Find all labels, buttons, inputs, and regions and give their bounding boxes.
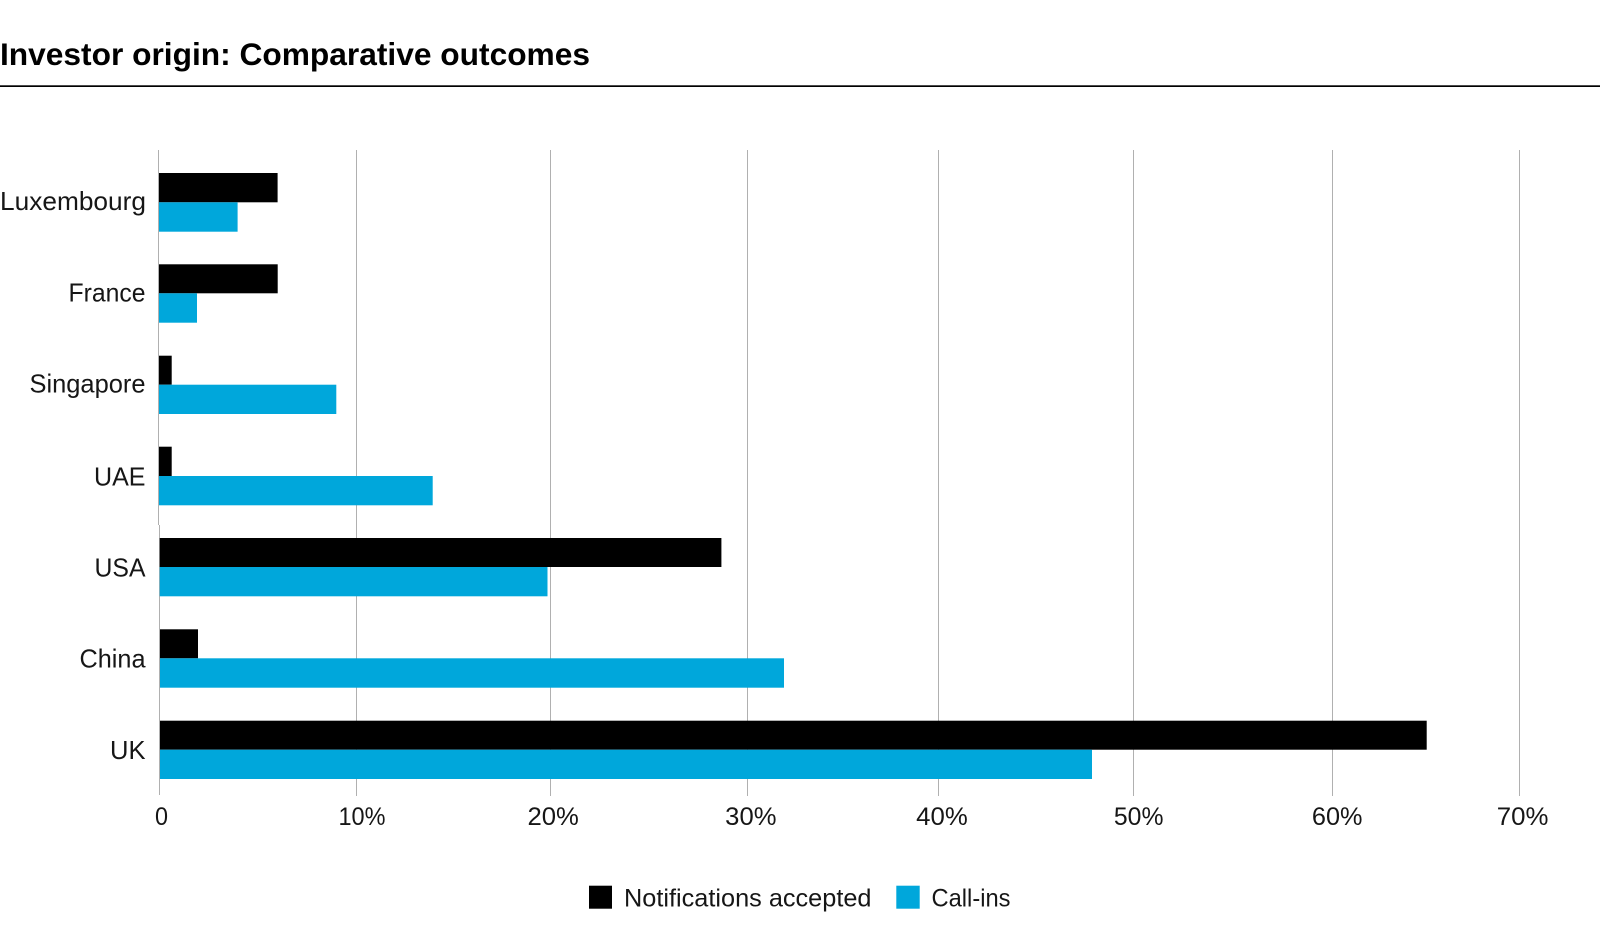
country labels: France — [68, 278, 146, 308]
x axis labels: 60% — [1312, 803, 1362, 831]
bars: France — [159, 264, 278, 323]
country labels: China — [80, 643, 146, 673]
x axis labels: 30% — [725, 803, 776, 831]
bars: China — [160, 629, 784, 688]
country labels: Luxembourg — [0, 186, 146, 216]
x axis labels: 40% — [916, 803, 968, 831]
legend: Call-ins — [932, 885, 1010, 913]
country labels: Singapore — [30, 369, 146, 399]
x axis labels — [155, 803, 1548, 831]
bars: Luxembourg — [159, 173, 278, 232]
x axis labels: 0 — [155, 803, 168, 831]
bars: UK — [160, 721, 1427, 779]
bar chart — [0, 150, 1548, 831]
country labels — [0, 186, 146, 765]
legend — [589, 885, 1010, 913]
bars: UAE — [159, 447, 433, 505]
x axis labels: 50% — [1114, 803, 1164, 831]
legend: Notifications accepted — [624, 885, 872, 913]
x axis labels: 10% — [338, 803, 386, 831]
country labels: UK — [110, 735, 146, 765]
x axis labels: 20% — [528, 803, 579, 831]
bars: Singapore — [159, 356, 336, 414]
country labels: USA — [94, 553, 146, 583]
x axis labels: 70% — [1497, 803, 1548, 831]
title: Investor origin: Comparative outcomes — [0, 36, 590, 72]
bars: USA — [160, 538, 721, 596]
country labels: UAE — [94, 462, 146, 492]
